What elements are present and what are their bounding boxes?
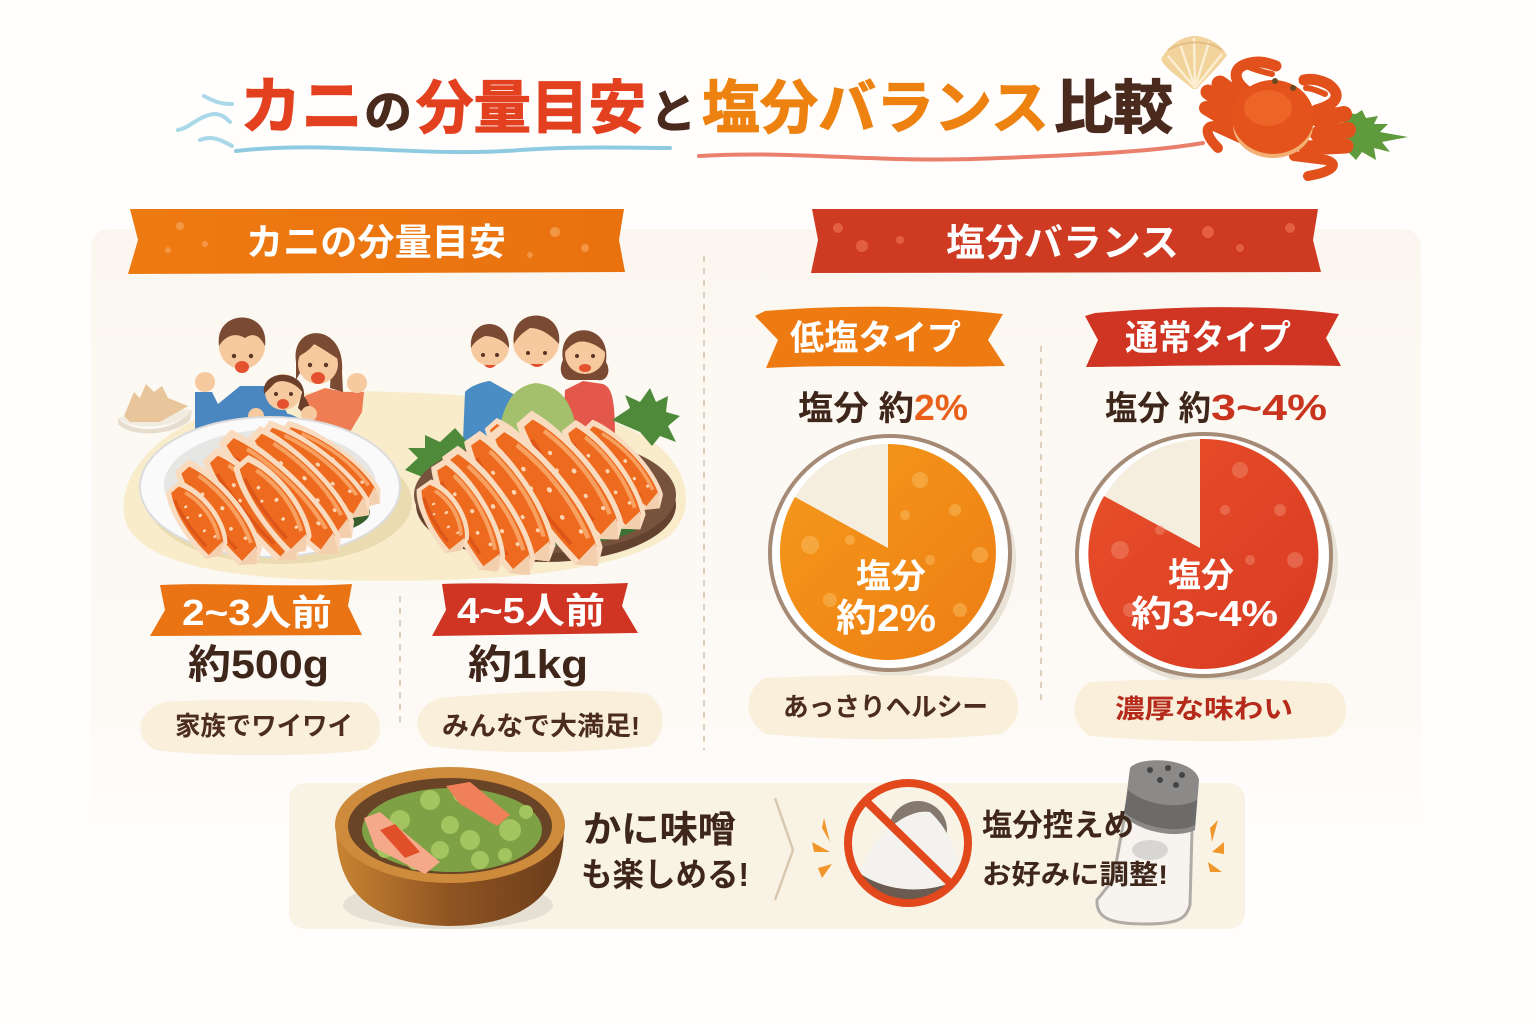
tip text: reduce salt: 塩分控えめ [982, 808, 1134, 843]
tag: regular [1085, 307, 1341, 367]
pill: family fun [140, 700, 380, 755]
salt label: about 2%: 塩分 約 [798, 390, 914, 428]
pie chart: 2%: 塩分 [856, 558, 926, 596]
tag: regular: 通常タイプ [1125, 319, 1291, 358]
main panel background [91, 229, 1421, 839]
tag: low salt [755, 307, 1005, 368]
tag: low salt: 低塩タイプ [790, 319, 961, 358]
pill: everyone satisfied: みんなで大満足! [442, 711, 640, 741]
icon: salt prohibited [848, 783, 968, 904]
icon: crab [1206, 62, 1408, 176]
tip text: reduce salt: お好みに調整! [982, 860, 1168, 890]
panel: salt balance [748, 209, 1346, 741]
icon: crab garnish leaf [1342, 110, 1408, 160]
heading banner: portion guide: カニの分量目安 [246, 222, 506, 263]
column: low salt type [748, 307, 1018, 739]
pie chart: 3-4%: 約3~4% [1131, 593, 1278, 634]
pill: light and healthy: あっさりヘルシー [783, 692, 988, 722]
pill: light and healthy [748, 675, 1018, 739]
column: regular type [1074, 307, 1346, 741]
pie chart: 3-4% [1077, 434, 1338, 685]
icon: herb garnish [405, 388, 680, 478]
title [240, 73, 1173, 142]
tag: 4-5 servings: 4~5人前 [457, 590, 605, 631]
icon: salt shaker [1097, 760, 1199, 924]
salt label: about 2% [798, 387, 968, 428]
pie chart: 3-4%: 塩分 [1168, 557, 1234, 595]
pill: rich flavor [1074, 679, 1346, 741]
title: カニ [240, 73, 363, 142]
pie chart: 2%: 約2% [836, 598, 936, 640]
table background blob [123, 391, 686, 581]
title: 分量目安 [416, 76, 646, 141]
pill: family fun: 家族でワイワイ [175, 711, 353, 741]
amount: 500g: 約500g [188, 643, 329, 687]
panel: bottom tips [289, 760, 1245, 929]
heading banner: salt balance: 塩分バランス [946, 223, 1179, 265]
illustration: family of three [195, 318, 367, 432]
heading banner: portion guide [128, 209, 625, 274]
pie chart: 2% [770, 436, 1016, 676]
pill: everyone satisfied [417, 691, 662, 752]
illustration: wooden plate with crab legs and herbs [405, 388, 680, 585]
title: 比較 [1054, 76, 1173, 141]
salt label: about 3-4% [1105, 387, 1327, 428]
icon: side dish crab meat bowl [118, 384, 192, 433]
panel: portion guide [118, 209, 686, 755]
tip text: crab miso [581, 809, 749, 893]
illustration: white plate with crab legs [140, 414, 412, 574]
amount: 1kg: 約1kg [468, 643, 588, 687]
salt label: about 3-4%: 塩分 約 [1105, 390, 1211, 428]
title: 塩分バランス [702, 76, 1049, 141]
tip text: reduce salt [982, 808, 1168, 890]
salt label: about 2%: 2% [914, 387, 968, 428]
pill: rich flavor: 濃厚な味わい [1115, 694, 1293, 724]
tip text: crab miso: も楽しめる! [581, 856, 749, 893]
icon: blue wave swirls [178, 96, 232, 146]
heading banner: salt balance [811, 209, 1321, 273]
icon: sparkle accents [812, 818, 1224, 878]
salt label: about 3-4%: 3~4% [1211, 387, 1327, 428]
icon: wooden bowl of crab miso [335, 767, 565, 929]
title: の [364, 86, 412, 138]
tip text: crab miso: かに味噌 [583, 809, 736, 850]
title: と [650, 86, 696, 138]
illustration: group of three [463, 316, 615, 440]
icon: scallop shell [1161, 36, 1227, 89]
tag: 4-5 servings [432, 583, 638, 636]
tag: 2-3 servings: 2~3人前 [182, 592, 332, 633]
tag: 2-3 servings [150, 584, 362, 636]
title underline waves [236, 143, 1203, 160]
